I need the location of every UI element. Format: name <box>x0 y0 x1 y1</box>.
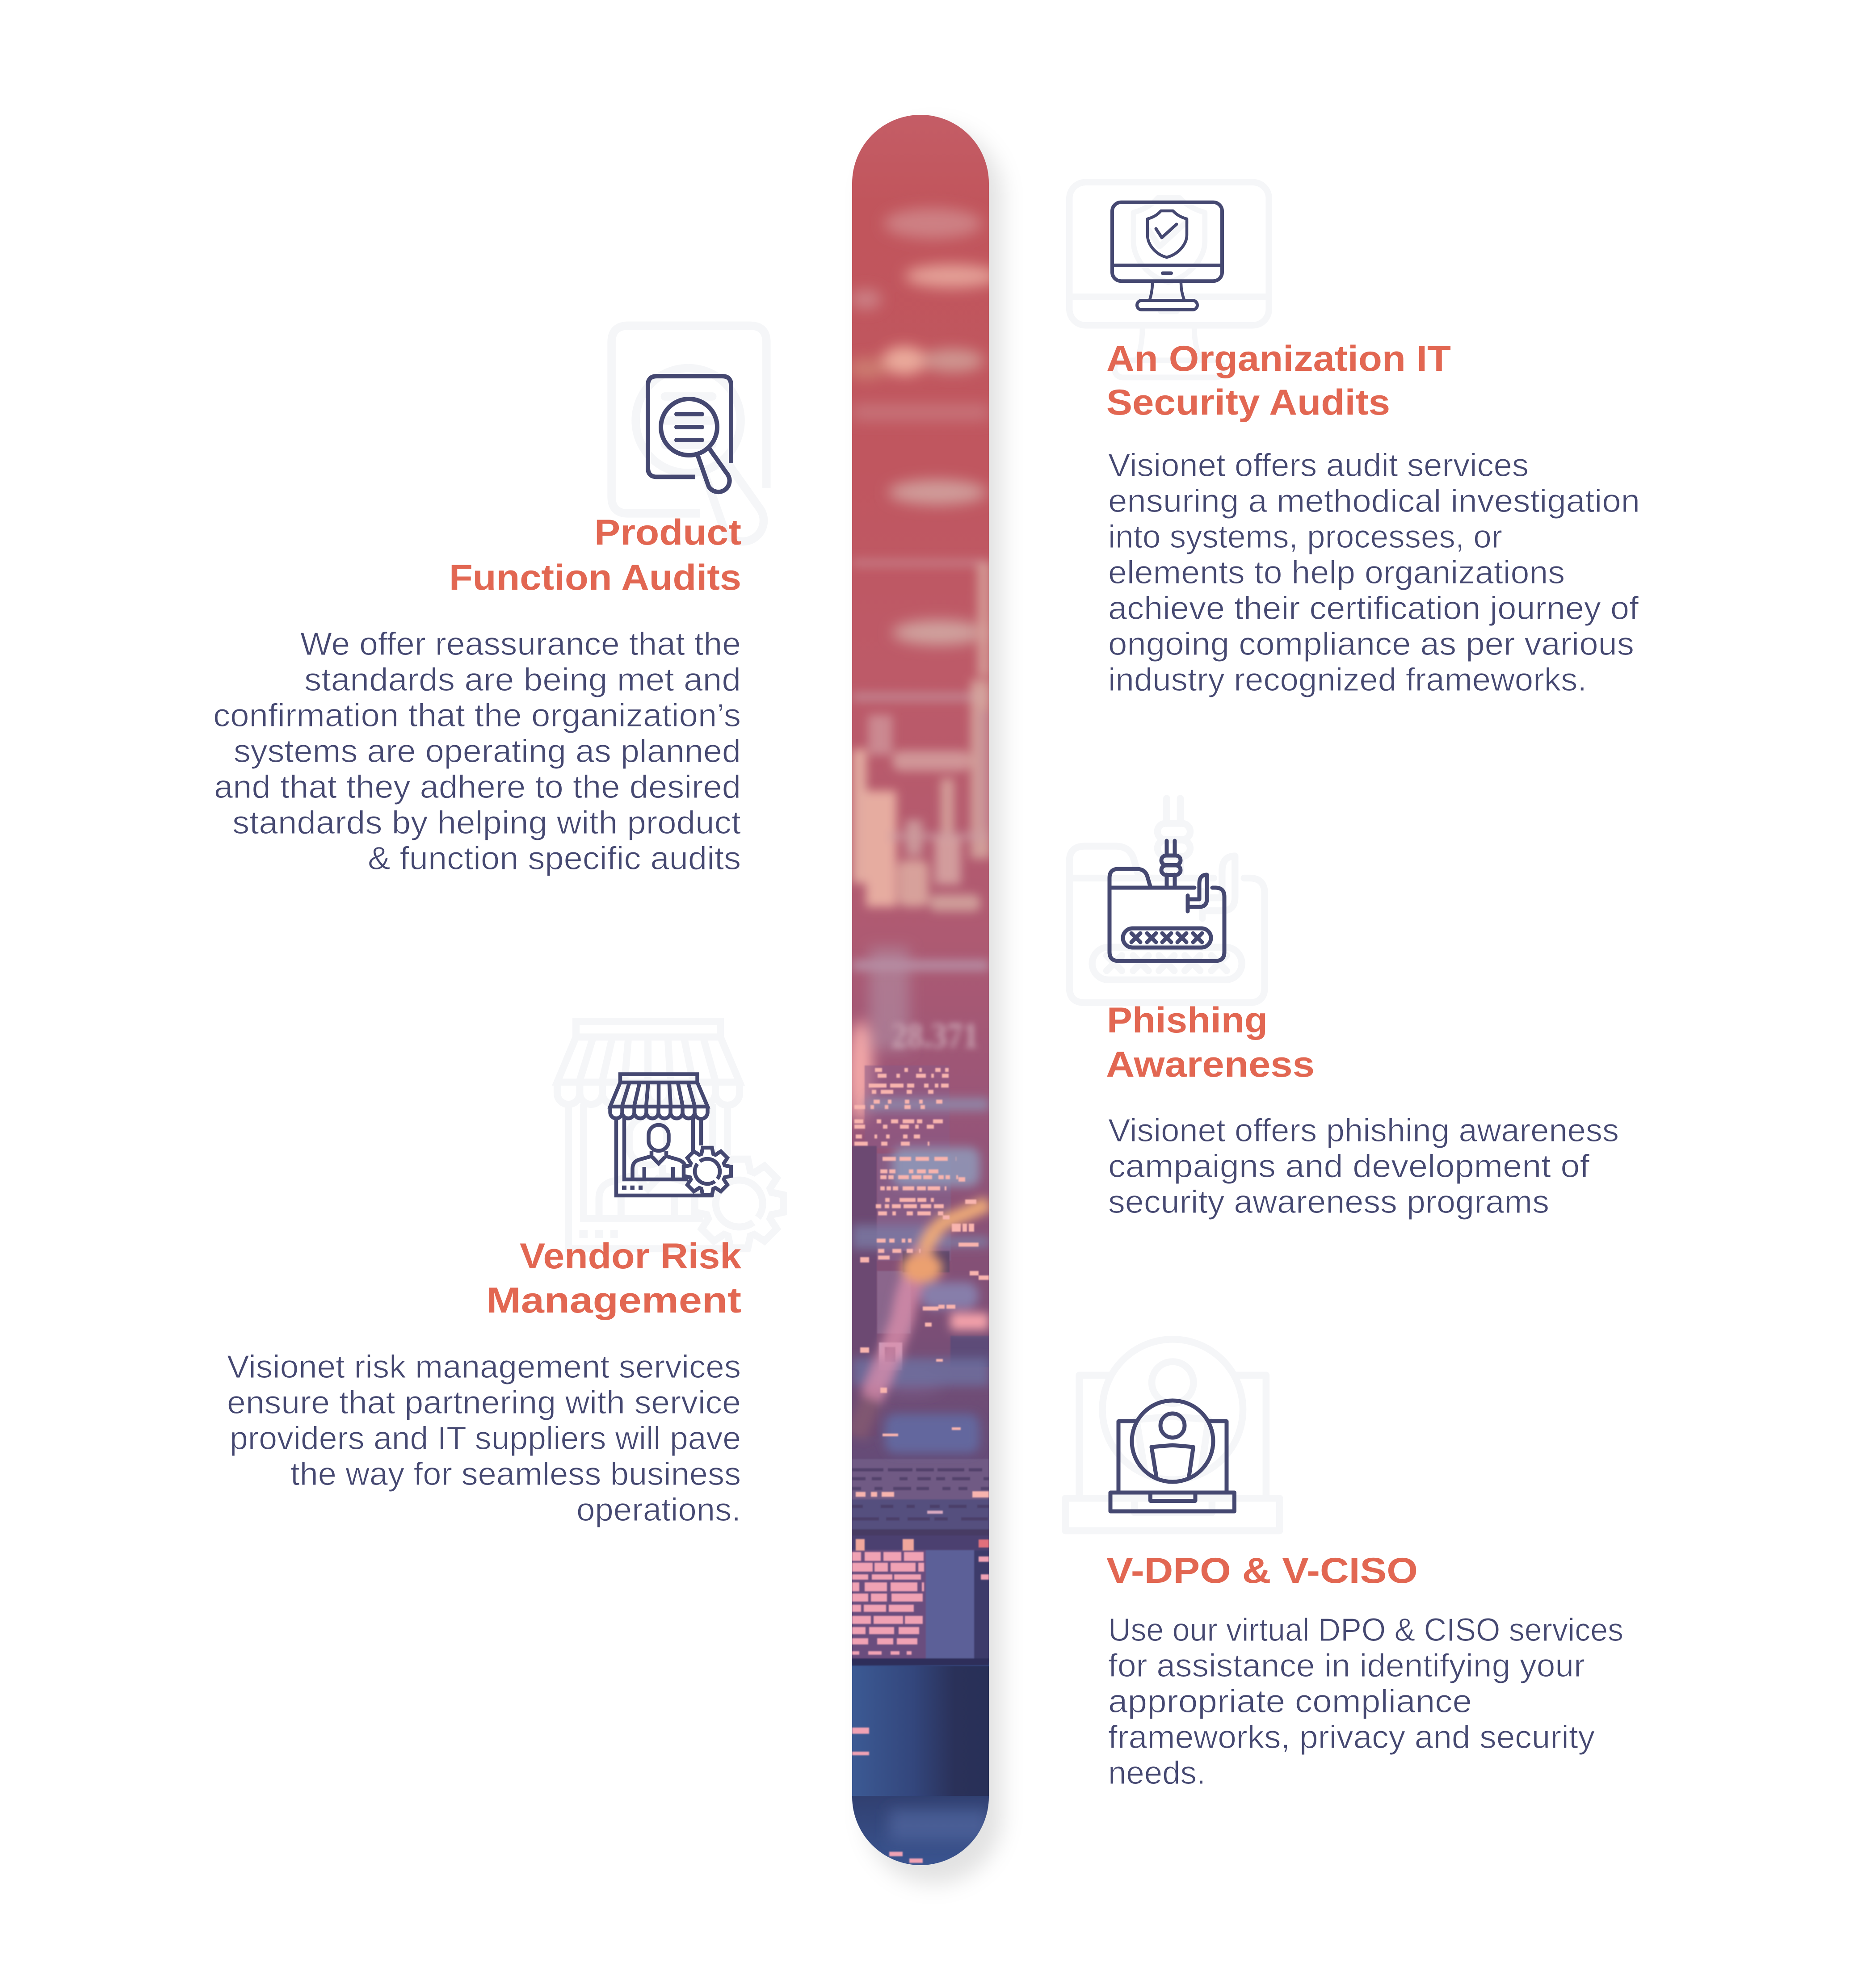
heading: phishing awareness: Phishing <box>1107 1000 1268 1040</box>
icon: ghost document magnifier <box>612 326 766 541</box>
text: product function audits description <box>213 626 741 877</box>
text: v-dpo description: for assistance in identifying your <box>1108 1648 1585 1684</box>
text: vendor risk description <box>227 1349 741 1528</box>
text: vendor risk description: ensure that partnering with service <box>227 1385 741 1421</box>
text: v-dpo description <box>1108 1612 1623 1791</box>
central pill with blended trading chart and city photo <box>852 115 989 1865</box>
panel: v-dpo and v-ciso <box>1065 1339 1623 1791</box>
text: phishing description: Visionet offers phishing awareness <box>1108 1113 1619 1149</box>
text: product function audits description: & function specific audits <box>368 841 741 877</box>
text: product function audits description: standards by helping with product <box>232 805 741 841</box>
text: vendor risk description: the way for seamless business <box>290 1456 741 1492</box>
icon: folder with fishing hook <box>1110 841 1224 961</box>
text: security audits description: ensuring a methodical investigation <box>1108 483 1640 519</box>
text: phishing description <box>1108 1113 1619 1220</box>
text: phishing description: security awareness programs <box>1108 1184 1549 1220</box>
text: v-dpo description: frameworks, privacy and security <box>1108 1720 1595 1755</box>
icon: laptop with person <box>1110 1401 1234 1511</box>
chart figure in pill: 28.371 <box>891 1015 979 1056</box>
text: product function audits description: We offer reassurance that the <box>300 626 741 662</box>
icon: ghost folder with fishing hook <box>1069 798 1265 1002</box>
heading: an organization IT security audits <box>1106 339 1451 423</box>
icon: storefront with gear <box>610 1074 731 1195</box>
shadow of central pill <box>866 127 1002 1884</box>
icon: ghost laptop with person <box>1065 1339 1280 1531</box>
text: security audits description: industry recognized frameworks. <box>1108 662 1587 698</box>
icon: monitor with shield <box>1112 202 1222 310</box>
text: vendor risk description: Visionet risk management services <box>227 1349 741 1385</box>
panel: product function audits <box>213 326 766 877</box>
heading: vendor risk management <box>486 1236 742 1321</box>
heading: vendor risk management: Management <box>486 1280 741 1321</box>
text: security audits description: achieve their certification journey of <box>1108 591 1639 626</box>
text: product function audits description: and that they adhere to the desired <box>214 769 741 805</box>
text: vendor risk description: providers and IT suppliers will pave <box>230 1421 741 1456</box>
text: security audits description: into systems, processes, or <box>1108 519 1502 555</box>
heading: phishing awareness <box>1106 1000 1315 1085</box>
heading: v-dpo and v-ciso: V-DPO & V-CISO <box>1106 1551 1418 1591</box>
text: product function audits description: systems are operating as planned <box>234 734 741 769</box>
text: security audits description: ongoing compliance as per various <box>1108 626 1634 662</box>
icon: ghost storefront with gear <box>557 1022 784 1249</box>
text: security audits description: elements to help organizations <box>1108 555 1565 591</box>
heading: an organization IT security audits: Security Audits <box>1106 382 1390 423</box>
heading: vendor risk management: Vendor Risk <box>520 1236 742 1276</box>
text: v-dpo description: Use our virtual DPO & CISO services <box>1108 1612 1623 1648</box>
panel: vendor risk management <box>227 1022 784 1528</box>
text: v-dpo description: appropriate compliance <box>1108 1684 1472 1720</box>
text: product function audits description: confirmation that the organization’s <box>213 698 741 734</box>
text: vendor risk description: operations. <box>576 1492 741 1528</box>
heading: product function audits <box>449 512 741 598</box>
text: phishing description: campaigns and development of <box>1108 1149 1590 1184</box>
text: security audits description: Visionet offers audit services <box>1108 448 1529 483</box>
text: v-dpo description: needs. <box>1108 1755 1206 1791</box>
panel: phishing awareness <box>1069 798 1619 1220</box>
icon: document magnifier <box>648 376 731 492</box>
heading: product function audits: Function Audits <box>449 558 741 598</box>
heading: phishing awareness: Awareness <box>1106 1044 1315 1085</box>
text: product function audits description: standards are being met and <box>304 662 741 698</box>
panel: organization IT security audits <box>1069 182 1640 698</box>
text: security audits description <box>1108 448 1640 698</box>
heading: product function audits: Product <box>594 512 741 553</box>
icon: ghost monitor with shield <box>1069 182 1269 377</box>
heading: an organization IT security audits: An Organization IT <box>1106 339 1451 379</box>
